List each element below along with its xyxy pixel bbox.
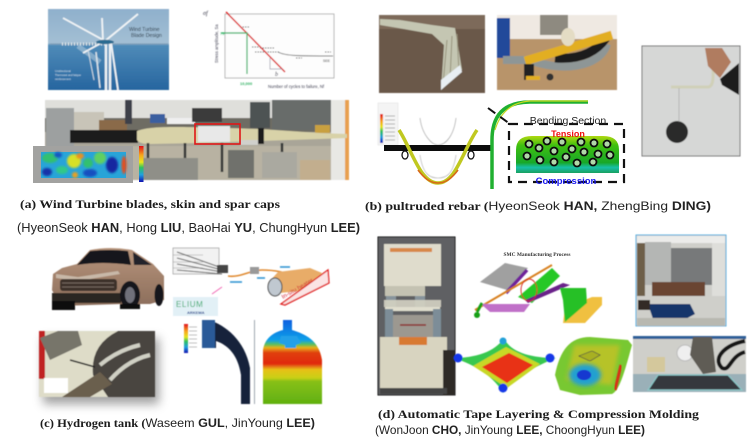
photo: offshore wind turbines: Thermoset and fatigue xyxy=(55,73,82,77)
diagram: bending section of rebar: Compression xyxy=(536,176,597,187)
chart: S-N fatigue curve: SEE xyxy=(323,59,331,63)
inset: strain heat map with colour bar xyxy=(33,146,144,183)
photo: rebar bending tool xyxy=(497,15,617,90)
photo: hydrogen fuel cell SUV xyxy=(52,248,164,310)
diagram: bending section of rebar: Bending Section xyxy=(530,115,606,127)
chart: S-N fatigue curve: 10,000 xyxy=(240,81,253,86)
photo: offshore wind turbines: reinforcement xyxy=(55,77,71,81)
diagram: FEA bending simulation with legend xyxy=(378,103,492,183)
caption (d): (d) Automatic Tape Layering & Compression Molding xyxy=(378,407,699,421)
logo: Elium Arkema xyxy=(173,297,218,316)
diagram: tank FEA results xyxy=(184,320,322,404)
caption (c) with authors: (c) Hydrogen tank ( Waseem GUL, JinYoung LEE) xyxy=(40,416,315,430)
photo: offshore wind turbines: Wind Turbine xyxy=(129,27,160,33)
diagram: bending section of rebar xyxy=(488,101,624,189)
panel: pultruded rebar xyxy=(365,15,740,213)
caption (b) with authors: (b) pultruded rebar ( HyeonSeok HAN, ZhengBing DING) xyxy=(365,199,711,213)
photo: heat gun tape head xyxy=(636,235,726,326)
logo: Elium Arkema: ELIUM xyxy=(176,300,203,309)
photo: blade fatigue test rig xyxy=(45,100,349,180)
diagram: in-situ heater tape winding xyxy=(173,248,329,305)
logo: Elium Arkema: ARKEMA xyxy=(187,310,205,315)
authors (a): (HyeonSeok HAN, Hong LIU, BaoHai YU, ChungHyun LEE) xyxy=(17,221,360,235)
photo: automatic tape layering robot xyxy=(633,336,746,392)
photo: offshore wind turbines: Blade Design xyxy=(131,33,162,39)
chart: S-N fatigue curve: Stress amplitude, Sa xyxy=(214,24,219,63)
chart: S-N fatigue curve: 79 xyxy=(220,31,225,36)
panel: automatic tape layering and compression molding xyxy=(375,235,746,437)
panel: hydrogen tank xyxy=(39,248,329,430)
chart: S-N fatigue curve: Number of cycles to failure, Nf xyxy=(268,84,325,89)
diagram: bending section of rebar: Tension xyxy=(551,129,585,139)
chart: S-N fatigue curve xyxy=(203,10,334,89)
diagram: draped sheet FEA xyxy=(453,338,556,393)
caption (a): (a) Wind Turbine blades, skin and spar caps xyxy=(20,197,280,211)
photo: offshore wind turbines xyxy=(48,9,169,90)
photo: bent rebar load test xyxy=(642,46,740,156)
authors (d): (WonJoon CHO, JinYoung LEE, ChoongHyun LEE) xyxy=(375,423,645,437)
diagram: SMC manufacturing process: SMC Manufacturing Process xyxy=(504,252,570,258)
chart: S-N fatigue curve: σf xyxy=(203,10,209,17)
diagram: molded part FEA xyxy=(555,337,632,395)
diagram: SMC manufacturing process xyxy=(474,252,602,323)
panel: wind turbine blades xyxy=(17,9,360,235)
photo: offshore wind turbines: Unidirectional xyxy=(55,69,71,73)
photo: bent rebar bundle xyxy=(379,15,485,93)
chart: S-N fatigue curve: b xyxy=(275,72,278,78)
photo: compression press xyxy=(378,237,455,395)
photo: filament winding machine xyxy=(39,331,159,404)
diagram: in-situ heater tape winding: In-situ heater xyxy=(281,278,314,301)
